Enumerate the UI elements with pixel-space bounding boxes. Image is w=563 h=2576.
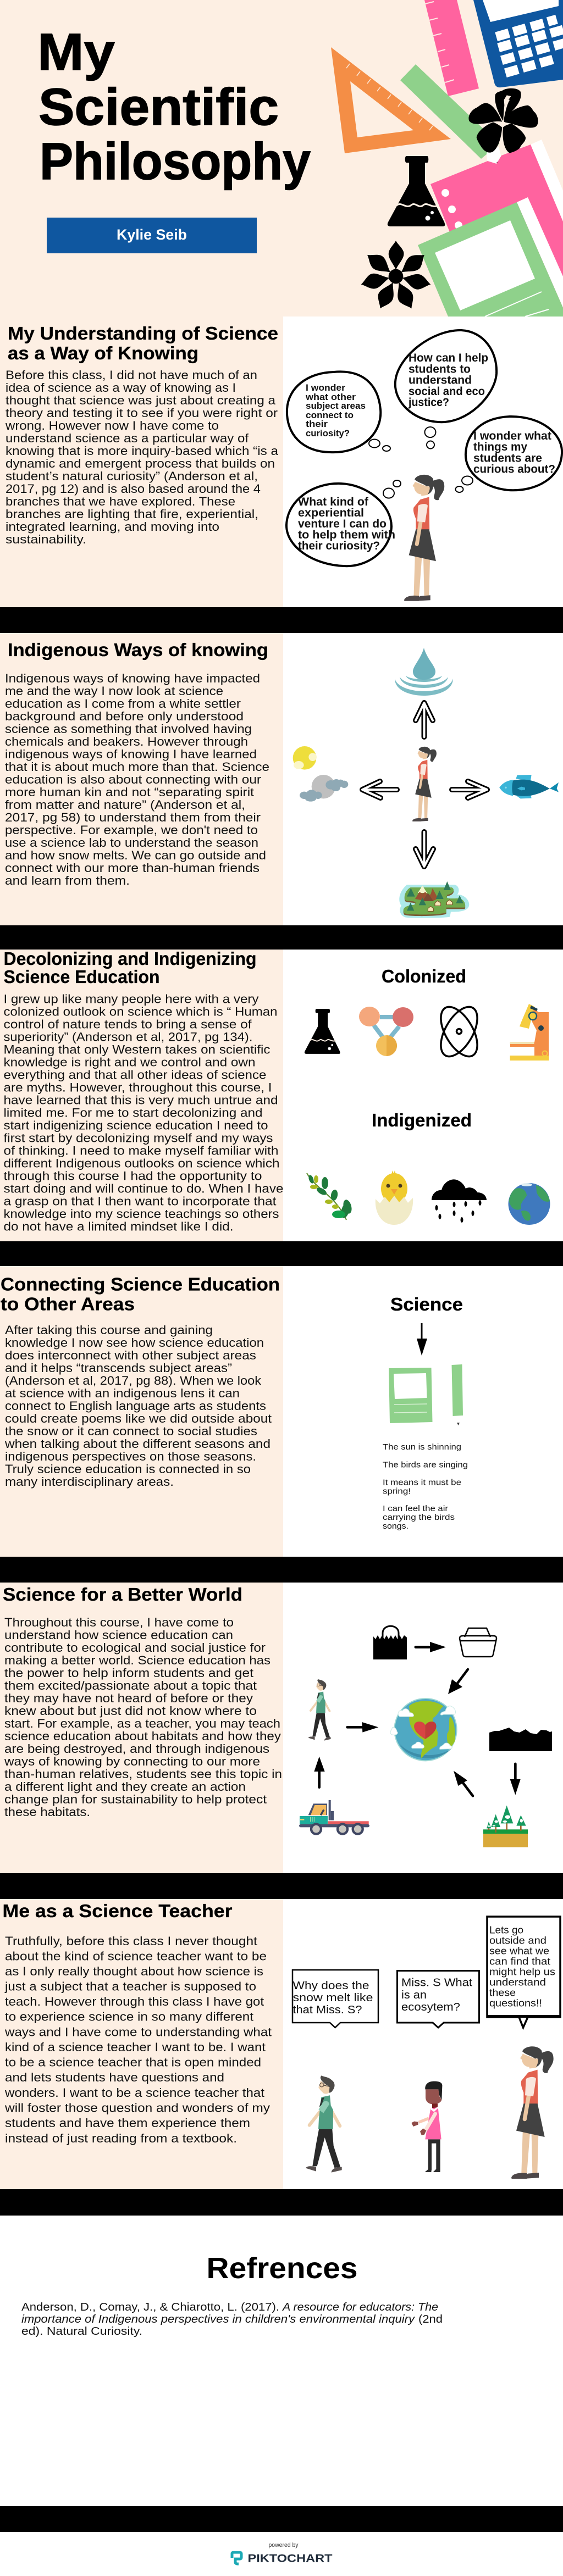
divider band xyxy=(0,1557,563,1583)
body text: of thinking. I need to make myself familiar with xyxy=(3,1144,279,1157)
thought bubble: experiential venture: experiential xyxy=(298,507,364,519)
icon: green pencil xyxy=(452,1364,463,1425)
body text: perspective. For example, we don't need to xyxy=(5,823,258,837)
icon: black flower xyxy=(359,241,432,312)
body text: a grasp on that I then want to incorporate that xyxy=(3,1195,277,1208)
body text: at science with an indigenous lens it can xyxy=(5,1386,240,1400)
body text: about the kind of science teacher want to be xyxy=(5,1950,267,1963)
body text: Throughout this course, I have come to xyxy=(4,1615,234,1629)
arrow: truck to boy xyxy=(314,1757,325,1787)
thought bubble: subject areas: their xyxy=(306,419,328,429)
heading xyxy=(1,1274,280,1314)
icon: truck xyxy=(299,1800,369,1834)
body text: instead of just reading from a textbook. xyxy=(5,2131,237,2145)
body text: are myths. However, throughout this course, I xyxy=(3,1080,272,1095)
divider band xyxy=(0,607,563,633)
thought bubble: students curious xyxy=(455,417,562,492)
body text: more human kin and not “separating spirit xyxy=(5,785,255,799)
body text: teach. However through this class I have got xyxy=(5,1995,264,2008)
body text: theory and testing it to see if you were right or xyxy=(5,406,278,420)
heading: Science for a Better World xyxy=(3,1584,242,1605)
heading: Me as a Science Teacher xyxy=(2,1901,233,1921)
citation: Anderson, D., Comay, J., & Chiarotto, L. (2017). xyxy=(21,2301,279,2313)
body text: many interdisciplinary areas. xyxy=(5,1475,174,1489)
body text: as I only really thought about how science is xyxy=(5,1964,263,1978)
body text: education as I come from a white settler xyxy=(5,697,241,710)
icon: green book xyxy=(389,1368,432,1423)
icon: chick xyxy=(376,1170,413,1225)
icon: pink ruler xyxy=(424,0,479,96)
icon: trees on soil xyxy=(483,1806,528,1847)
body text: sustainability. xyxy=(5,532,86,546)
speech bubble: ecosystem: is an xyxy=(401,1989,427,2001)
title: Philosophy xyxy=(40,132,311,191)
thought bubble: social and eco justice: understand xyxy=(409,374,472,387)
panel: understanding of science xyxy=(0,317,563,607)
speech bubble: snow melt: that Miss. S? xyxy=(292,2003,362,2016)
panel: references xyxy=(0,2216,563,2506)
poem: The birds are singing xyxy=(383,1461,468,1469)
body text: indigenous ways of knowing I have learned xyxy=(5,747,257,761)
arrow: left xyxy=(362,781,397,798)
footer: powered by piktochart: powered by xyxy=(268,2542,299,2549)
thought bubble: students curious: things my xyxy=(473,441,527,453)
heading: Indigenous Ways of knowing xyxy=(8,640,268,660)
footer: powered by piktochart: PIKTOCHART xyxy=(247,2553,332,2565)
body text: and lets students have questions and xyxy=(5,2070,224,2084)
citation: (2nd xyxy=(418,2313,443,2325)
body text: does interconnect with other subject areas xyxy=(5,1348,256,1362)
body text: start doing and will continue to do. When I have xyxy=(3,1181,284,1196)
body text: understand science as a particular way of xyxy=(5,431,249,445)
icon: clouds xyxy=(300,775,348,802)
speech bubble: lets go outside: understand xyxy=(489,1976,546,1988)
figure: teacher thinking xyxy=(404,475,444,601)
speech bubble: lets go outside: questions!! xyxy=(489,1997,542,2009)
speech bubble: lets go outside: might help us xyxy=(489,1966,555,1977)
body text: me and the way I now look at science xyxy=(5,684,223,698)
body text: kind of a science teacher I want to be. I want xyxy=(5,2040,266,2054)
body text: different Indigenous outlooks on science which xyxy=(3,1156,279,1170)
body text: understand how science education can xyxy=(4,1628,233,1642)
body text: (Anderson et al, 2017, pg 88). When we look xyxy=(5,1374,262,1387)
icon: black terrain xyxy=(489,1728,552,1751)
body text: knowledge I now see how science education xyxy=(5,1336,264,1350)
subheading: science: Science xyxy=(390,1294,463,1314)
thought bubble: social and eco justice: justice? xyxy=(408,396,449,409)
body text: than-human relatives, students see this topic in xyxy=(4,1767,282,1781)
subheading: colonized: Colonized xyxy=(382,966,466,986)
panel: indigenous ways of knowing xyxy=(0,633,563,925)
icon: water drop xyxy=(395,648,453,696)
citation: importance of Indigenous perspectives in children's environmental inquiry xyxy=(21,2313,415,2325)
citation xyxy=(21,2301,443,2338)
heading: as a Way of Knowing xyxy=(8,343,198,363)
body text: I grew up like many people here with a very xyxy=(3,992,259,1006)
body text xyxy=(3,992,284,1233)
title: My xyxy=(37,23,115,81)
arrow: down xyxy=(417,1323,427,1356)
body text: through this course I had the opportunity to xyxy=(3,1169,262,1182)
speech bubble: ecosystem: Miss. S What xyxy=(401,1976,472,1989)
arrow: boy to earth xyxy=(347,1722,378,1733)
body text: do not have a limited mindset like I did. xyxy=(3,1220,233,1233)
body text: education is also about connecting with our xyxy=(5,773,262,786)
thought bubble: experiential venture: What kind of xyxy=(298,496,369,508)
thought bubble: social and eco justice: social and eco xyxy=(409,385,485,398)
icon: rain cloud xyxy=(432,1179,487,1223)
panel: science for a better world xyxy=(0,1583,563,1873)
speech bubble: snow melt: Why does the xyxy=(292,1979,369,1992)
body text xyxy=(4,1934,272,2145)
speech bubble: snow melt: snow melt like xyxy=(292,1991,373,2004)
arrow: right xyxy=(452,781,487,798)
icon: black bag xyxy=(373,1626,407,1659)
body text: connect to English language arts as students xyxy=(5,1399,266,1413)
body text: idea of science as a way of knowing as I xyxy=(5,381,236,395)
divider band xyxy=(0,2189,563,2216)
body text: just a subject that a teacher is supposed to xyxy=(4,1979,256,1994)
divider band xyxy=(0,925,563,950)
thought bubble: social and eco justice: How can I help xyxy=(409,352,488,364)
heading: Science Education xyxy=(3,967,159,987)
icon: white pencil xyxy=(487,147,503,165)
citation: ed). Natural Curiosity. xyxy=(21,2325,142,2338)
body text: knowledge is right and we control and own xyxy=(3,1055,255,1069)
thought bubble: subject areas xyxy=(287,371,390,452)
body text: superiority” (Anderson et al, 2017, pg 134). xyxy=(3,1030,253,1044)
heading: to Other Areas xyxy=(1,1293,135,1314)
arrow: bag to basket xyxy=(416,1642,446,1652)
icon: earth xyxy=(508,1183,550,1225)
body text: wonders. I want to be a science teacher that xyxy=(4,2086,265,2100)
poem xyxy=(383,1443,468,1531)
body text: a different light and they create an action xyxy=(4,1780,246,1794)
poem: It means it must be xyxy=(383,1478,461,1487)
figure: student in pink xyxy=(411,2081,442,2172)
footer: powered by piktochart xyxy=(0,2532,563,2576)
body text: Indigenous ways of knowing have impacted xyxy=(5,671,260,685)
panel: decolonizing and indigenizing xyxy=(0,948,563,1241)
icon: branch xyxy=(307,1173,353,1220)
subheading: indigenized: Indigenized xyxy=(372,1110,472,1130)
body text: student’s natural curiosity” (Anderson et al, xyxy=(5,469,258,483)
body text: from matter and nature” (Anderson et al, xyxy=(5,798,245,812)
poem: I can feel the air xyxy=(383,1504,448,1513)
speech bubble: lets go outside xyxy=(487,1917,561,2028)
body text: indigenous perspectives on those seasons. xyxy=(5,1450,256,1463)
body text: connect with our more than-human friends xyxy=(5,861,260,875)
figure: boy student xyxy=(306,2075,342,2173)
body text: thought that science was just about creating a xyxy=(5,393,276,407)
heading xyxy=(8,323,278,363)
thought bubble: experiential venture: to help them with xyxy=(298,529,395,541)
panel: me as a science teacher xyxy=(0,1899,563,2189)
body text: have learned that this is very much untrue and xyxy=(3,1093,278,1107)
arrow: down xyxy=(416,832,433,867)
body text: limited me. For me to start decolonizing and xyxy=(3,1106,263,1120)
body text: science education about habitats and how they xyxy=(4,1729,282,1743)
body text: them excited/passionate about a topic that xyxy=(4,1679,257,1692)
speech bubble: lets go outside: see what we xyxy=(489,1945,549,1956)
body text: making a better world. Science education has xyxy=(4,1653,271,1667)
figure: teacher xyxy=(511,2046,554,2179)
speech bubble: lets go outside: these xyxy=(489,1987,516,1998)
thought bubble: subject areas: connect to xyxy=(306,410,354,420)
thought bubble: students curious: curious about? xyxy=(473,463,555,476)
body text: start. For example, as a teacher, you may teach xyxy=(4,1717,280,1730)
figure: boy walking xyxy=(308,1679,331,1741)
body text: Truly science education is connected in so xyxy=(5,1462,251,1476)
body text xyxy=(5,671,269,887)
body text: start indigenizing science education I need to xyxy=(3,1119,268,1132)
body text: everything and that all other ideas of science xyxy=(3,1068,266,1081)
body text: integrated learning, and moving into xyxy=(5,520,219,534)
poem: carrying the birds xyxy=(383,1513,455,1522)
arrow: up xyxy=(416,703,433,737)
speech bubble: snow melt xyxy=(292,1970,378,2028)
icon: calculator xyxy=(473,0,563,87)
heading: Decolonizing and Indigenizing xyxy=(3,948,256,969)
body text: knowledge into my science teachings so others xyxy=(3,1207,279,1221)
citation: A resource for educators: The xyxy=(282,2301,438,2313)
heading: Refrences xyxy=(207,2252,357,2285)
body text: that it is about much more than that. Science xyxy=(5,760,269,774)
body text: knew about but just did not know where to xyxy=(4,1704,257,1718)
body text: dynamic and emergent process that builds on xyxy=(5,457,275,470)
body text: will foster those question and wonders of my xyxy=(4,2101,271,2114)
thought bubble: social and eco justice xyxy=(395,330,496,448)
icon: hibiscus flower xyxy=(468,88,538,153)
body text: could create poems like we did outside about xyxy=(5,1412,272,1425)
arrow: terrain to trees xyxy=(510,1764,521,1795)
thought bubble: subject areas: subject areas xyxy=(306,401,366,411)
panel: connecting science education xyxy=(0,1266,563,1557)
icon: sun xyxy=(293,746,317,770)
body text: background and before only understood xyxy=(5,709,244,723)
body text: ways and I have come to understanding what xyxy=(4,2025,272,2039)
poem: songs. xyxy=(383,1522,409,1531)
icon: flask xyxy=(388,156,445,226)
body text: contribute to ecological and social justice for xyxy=(4,1641,266,1655)
icon: molecule xyxy=(359,1007,413,1056)
body text: branches are lighting that fire, experiential, xyxy=(5,507,258,521)
body text: science as something that involved having xyxy=(5,722,252,736)
body text: and learn from them. xyxy=(5,874,130,887)
body text: wrong. However now I have come to xyxy=(5,419,219,432)
title xyxy=(37,23,311,191)
author badge xyxy=(47,218,257,253)
arrow: basket to earth xyxy=(448,1669,468,1694)
body text: use a science lab to understand the season xyxy=(5,836,258,850)
body text xyxy=(5,368,279,546)
body text: branches that we have explored. These xyxy=(5,495,235,508)
speech bubble: lets go outside: Lets go xyxy=(489,1924,523,1935)
icon: green sheet xyxy=(418,197,563,317)
divider band xyxy=(0,2506,563,2532)
speech bubble: lets go outside: outside and xyxy=(489,1934,547,1946)
divider band xyxy=(0,1241,563,1266)
body text xyxy=(4,1615,282,1819)
icon: green ruler xyxy=(400,64,499,159)
body text: these habitats. xyxy=(4,1805,90,1819)
body text: ways of knowing by connecting to our more xyxy=(4,1755,260,1768)
icon: basket xyxy=(460,1628,496,1657)
thought bubble: subject areas: what other xyxy=(305,392,356,402)
poem: The sun is shinning xyxy=(383,1443,461,1452)
speech bubble: ecosystem: ecosytem? xyxy=(401,2001,460,2013)
body text: chemicals and beakers. However through xyxy=(5,735,248,748)
author badge: Kylie Seib xyxy=(117,226,187,243)
thought bubble: social and eco justice: students to xyxy=(409,363,471,376)
icon: fish xyxy=(499,775,559,798)
icon: orange set square xyxy=(331,47,451,153)
icon: piktochart logo xyxy=(232,2552,241,2564)
body text: 2017, pg 12) and is also based around the 4 xyxy=(5,482,261,496)
thought bubble: students curious: I wonder what xyxy=(473,430,551,442)
icon: atom xyxy=(433,1001,485,1062)
icon: earth with heart xyxy=(390,1698,457,1761)
body text: Truthfully, before this class I never thought xyxy=(5,1934,258,1948)
figure: teacher centre xyxy=(412,747,437,821)
body text xyxy=(4,1323,272,1489)
arrow: trees to earth xyxy=(454,1771,473,1796)
icon: pink notebook xyxy=(430,140,563,317)
body text: are being destroyed, and through indigenous xyxy=(4,1742,269,1756)
thought bubble: experiential venture: venture I can do xyxy=(298,518,387,530)
thought bubble: subject areas: I wonder xyxy=(306,382,345,393)
body text: to be a science teacher that is open minded xyxy=(5,2055,261,2069)
icon: microscope xyxy=(510,1004,549,1061)
thought bubble: experiential venture: their curiosity? xyxy=(298,540,380,552)
body text: to experience science in so many different xyxy=(5,2010,254,2023)
icon: island xyxy=(399,881,469,918)
panel: header xyxy=(0,0,563,317)
thought bubble: subject areas: curiosity? xyxy=(306,428,350,438)
body text: when talking about the different seasons and xyxy=(4,1437,271,1451)
body text: first start by decolonizing myself and my ways xyxy=(3,1131,273,1145)
thought bubble: experiential venture xyxy=(286,480,401,566)
body text: the snow or it can connect to social studies xyxy=(5,1424,257,1438)
body text: Before this class, I did not have much of an xyxy=(5,368,257,382)
body text: colonized outlook on science which is “ Human xyxy=(3,1004,277,1019)
body text: the power to help inform students and get xyxy=(4,1666,254,1680)
icon: flask small xyxy=(305,1009,340,1054)
title: Scientific xyxy=(38,78,279,136)
heading: My Understanding of Science xyxy=(8,323,278,343)
poem: spring! xyxy=(383,1487,411,1496)
body text: knowing that is more inquiry-based which “is a xyxy=(5,444,279,458)
body text: they may have not heard of before or they xyxy=(4,1691,253,1705)
body text: change plan for sustainability to help protect xyxy=(4,1792,267,1806)
body text: and how snow melts. We can go outside and xyxy=(5,848,266,862)
body text: 2017, pg 58) to understand them from their xyxy=(5,810,261,824)
speech bubble: lets go outside: can find that xyxy=(489,1955,550,1967)
body text: students and have them experience them xyxy=(5,2116,250,2130)
speech bubble: ecosystem xyxy=(397,1970,479,2028)
heading: Connecting Science Education xyxy=(1,1274,280,1295)
heading xyxy=(3,948,256,987)
body text: After taking this course and gaining xyxy=(5,1323,213,1337)
body text: and it helps “transcends subject areas” xyxy=(5,1361,232,1375)
divider band xyxy=(0,1873,563,1899)
thought bubble: students curious: students are xyxy=(473,452,542,465)
body text: control of nature tends to bring a sense of xyxy=(3,1018,252,1031)
body text: Meaning that only Western takes on scientific xyxy=(3,1043,271,1056)
